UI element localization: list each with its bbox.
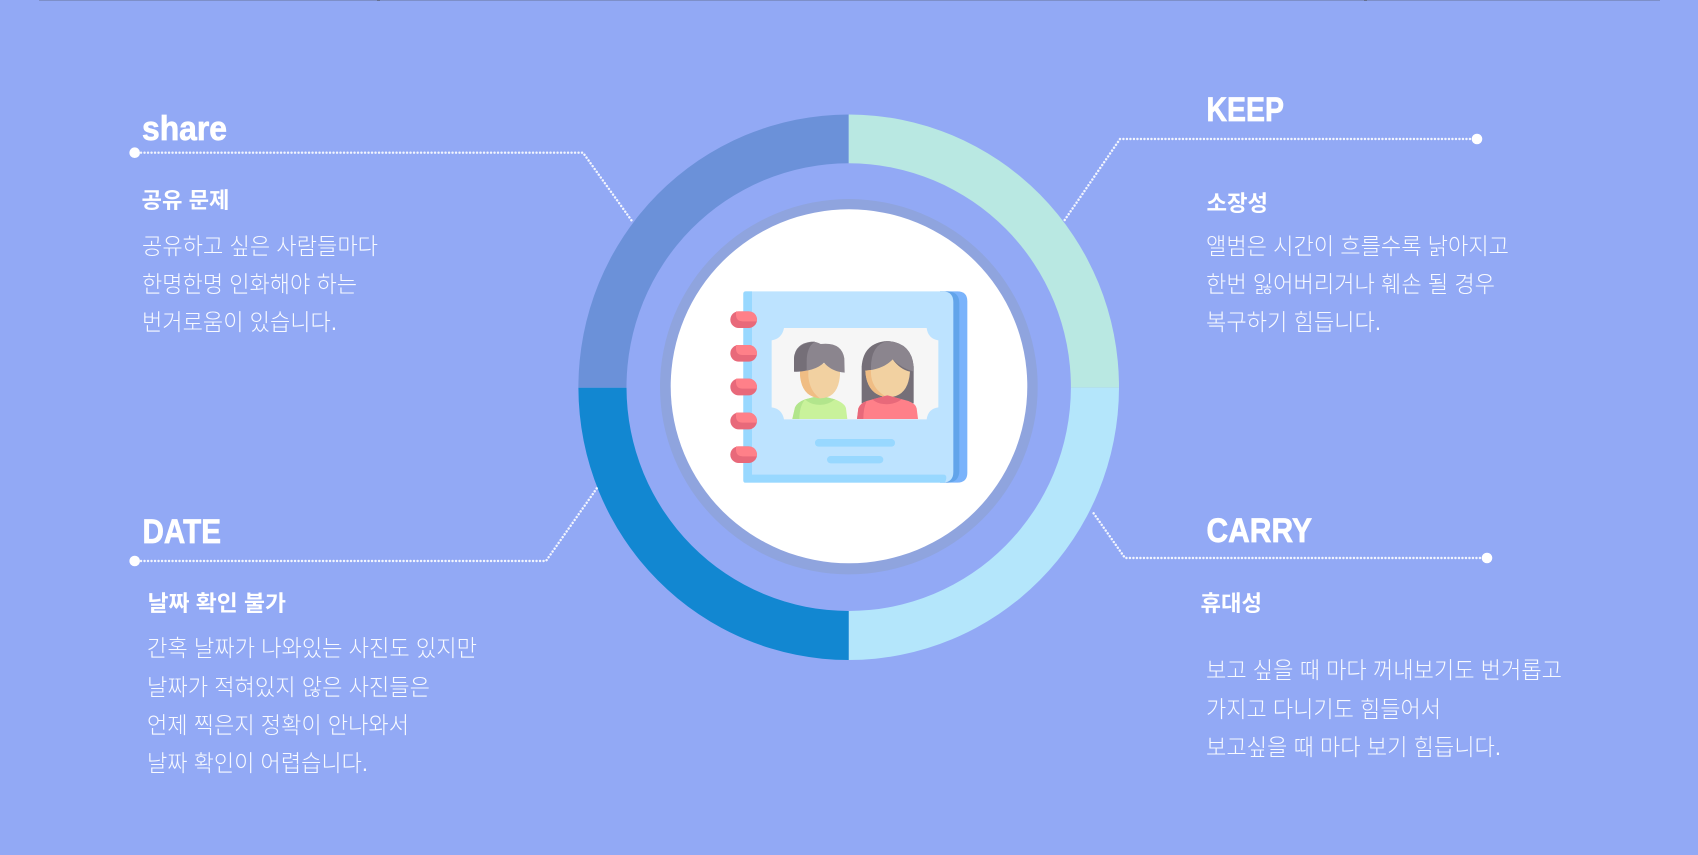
woman: [857, 341, 918, 419]
body text: DATE: 간혹 날짜가 나와있는 사진도 있지만: [147, 635, 477, 661]
marker dot: DATE: [129, 556, 140, 566]
body text: DATE: 언제 찍은지 정확이 안나와서: [147, 712, 409, 738]
man: [792, 342, 847, 419]
body text: share: 공유하고 싶은 사람들마다: [142, 233, 378, 259]
body text: share: 한명한명 인화해야 하는: [142, 271, 357, 297]
segment: CARRY: [849, 388, 1119, 660]
marker dot: share: [129, 147, 140, 158]
segment: KEEP: [849, 114, 1119, 388]
body text: DATE: 날짜가 적혀있지 않은 사진들은: [147, 674, 430, 700]
panel: share: [129, 110, 633, 335]
center circle with grey outline: [660, 199, 1038, 574]
body text: CARRY: 가지고 다니기도 힘들어서: [1206, 696, 1441, 722]
body text: CARRY: 보고 싶을 때 마다 꺼내보기도 번거롭고: [1206, 657, 1562, 683]
heading: KEEP: KEEP: [1206, 91, 1284, 129]
body text: CARRY: 보고싶을 때 마다 보기 힘듭니다.: [1206, 734, 1501, 760]
subheading: 공유 문제: 공유 문제: [142, 188, 230, 213]
body text: DATE: 날짜 확인이 어렵습니다.: [147, 750, 368, 776]
body text: DATE: [147, 635, 477, 776]
marker dot: KEEP: [1472, 134, 1482, 144]
body text: CARRY: [1206, 657, 1562, 760]
subheading: 소장성: 소장성: [1206, 191, 1268, 216]
subheading: 날짜 확인 불가: 날짜 확인 불가: [148, 591, 286, 616]
panel: DATE: [129, 488, 597, 776]
donut ring chart: [578, 114, 1119, 660]
body text: KEEP: 한번 잃어버리거나 훼손 될 경우: [1206, 271, 1495, 297]
body text: KEEP: 앨범은 시간이 흐를수록 낡아지고: [1206, 233, 1509, 259]
connector: share: [134, 153, 633, 222]
marker dot: CARRY: [1482, 553, 1492, 563]
connector: DATE: [134, 488, 597, 561]
heading: CARRY: CARRY: [1206, 512, 1312, 550]
heading: DATE: DATE: [142, 513, 221, 551]
connector: KEEP: [1064, 139, 1477, 221]
body text: KEEP: [1206, 233, 1509, 335]
segment: share: [578, 114, 849, 388]
segment: DATE: [578, 388, 849, 660]
panel: KEEP: [1064, 91, 1509, 335]
panel: CARRY: [1092, 511, 1562, 760]
body text: share: [142, 233, 378, 335]
connector: CARRY: [1092, 511, 1487, 558]
heading: share: share: [142, 110, 227, 148]
icon: photo album: [730, 291, 967, 483]
body text: share: 번거로움이 있습니다.: [142, 309, 337, 335]
subheading: 휴대성: 휴대성: [1200, 591, 1262, 616]
body text: KEEP: 복구하기 힘듭니다.: [1206, 309, 1381, 335]
